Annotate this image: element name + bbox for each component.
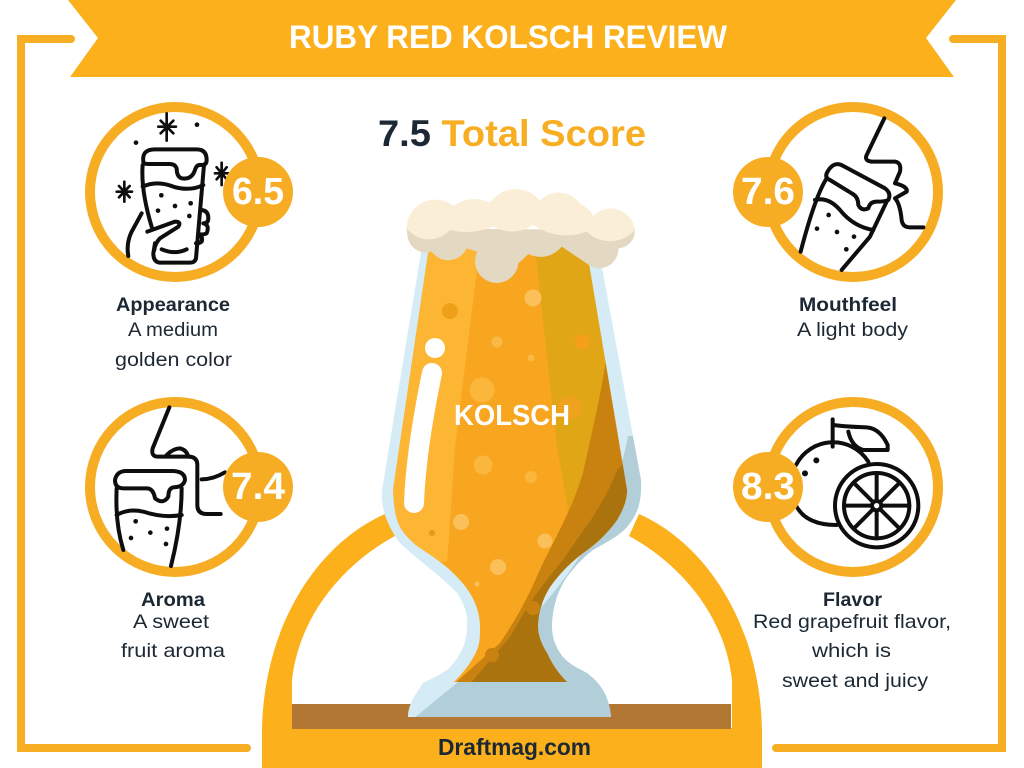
glass shaded side: [414, 436, 660, 718]
beer glass: [380, 189, 660, 718]
appearance text: [115, 294, 233, 371]
beer liquid: [393, 246, 627, 682]
mouthfeel text: Mouthfeel: [799, 294, 897, 316]
aroma text: fruit aroma: [121, 640, 225, 662]
score badge 7.6: 7.6: [741, 171, 795, 213]
glass body: [382, 240, 641, 717]
beer label: KOLSCH: [454, 400, 570, 432]
panel: aroma: [90, 402, 293, 662]
score badge 8.3: [733, 452, 803, 522]
glass highlight dot: [425, 338, 445, 358]
icon: drinking from glass: [768, 107, 938, 277]
total score heading: 7.5 Total Score: [378, 113, 646, 154]
flavor text: sweet and juicy: [782, 670, 928, 692]
frame: right bracket: [776, 39, 1002, 748]
appearance text: A medium: [128, 319, 218, 341]
score badge 8.3: 8.3: [741, 466, 795, 508]
flavor text: Red grapefruit flavor,: [753, 611, 951, 633]
title: RUBY RED KOLSCH REVIEW: [289, 19, 728, 55]
icon: citrus fruit: [768, 402, 938, 572]
frame: left bracket: [21, 39, 247, 748]
bubbles: [429, 290, 590, 662]
mouthfeel text: [797, 294, 908, 341]
brown table bar: [292, 704, 731, 729]
flavor text: Flavor: [823, 589, 882, 611]
panel: flavor: [733, 402, 951, 692]
mouthfeel text: A light body: [797, 319, 908, 341]
appearance text: Appearance: [116, 294, 230, 316]
score badge 6.5: [223, 157, 293, 227]
appearance text: golden color: [115, 349, 233, 371]
aroma text: Aroma: [141, 589, 205, 611]
title banner: [68, 0, 956, 77]
arch behind glass: [262, 514, 762, 768]
score badge 7.4: 7.4: [231, 466, 285, 508]
icon: hand holding beer glass: [90, 107, 260, 277]
foam: [407, 189, 635, 283]
icon: smelling beer: [90, 402, 260, 572]
score badge 6.5: 6.5: [232, 171, 284, 213]
site credit: Draftmag.com: [438, 734, 591, 760]
score badge 7.6: [733, 157, 803, 227]
aroma text: [121, 589, 225, 662]
flavor text: [753, 589, 951, 692]
glass highlight bar: [414, 373, 432, 503]
score badge 7.4: [223, 452, 293, 522]
flavor text: which is: [811, 640, 891, 662]
aroma text: A sweet: [133, 611, 210, 633]
panel: mouthfeel: [733, 107, 938, 341]
panel: appearance: [90, 107, 293, 371]
